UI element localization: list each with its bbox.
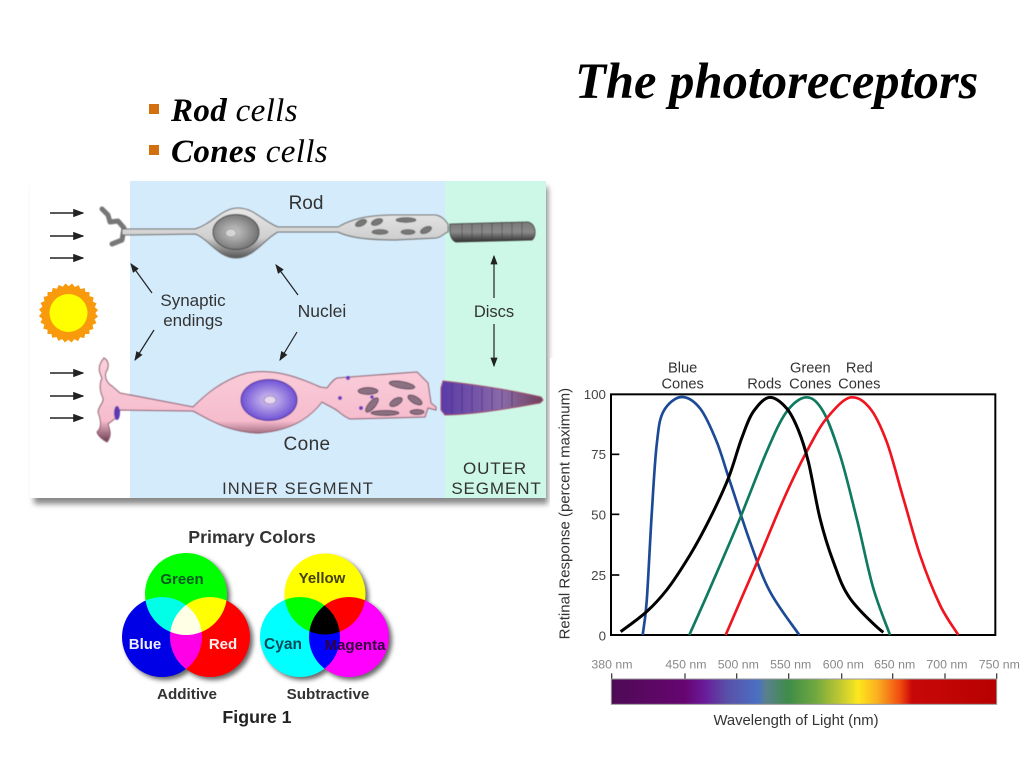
- diagram labels: [160, 193, 542, 498]
- label: Yellow: Yellow: [299, 570, 346, 587]
- y axis ticks: [611, 454, 619, 575]
- icon: sun: [39, 283, 98, 343]
- label: Cyan: Cyan: [264, 636, 302, 653]
- wavelength ticks: [612, 673, 997, 679]
- label: rods: Rods: [747, 377, 781, 393]
- caption: subtractive: Subtractive: [287, 686, 369, 703]
- value: 0: 0: [599, 628, 606, 643]
- panel: rod and cone diagram: [30, 181, 548, 504]
- wavelength labels: [591, 658, 1020, 672]
- curve: red cones: [726, 397, 958, 635]
- label: 380 nm: 380 nm: [591, 658, 633, 672]
- label: 650 nm: 650 nm: [874, 658, 915, 672]
- panel: primary colors: [122, 527, 389, 727]
- label: Rod: Rod: [289, 193, 323, 214]
- circle labels: [129, 570, 386, 654]
- label: green cones: Green: [790, 361, 831, 377]
- chart: additive circles: [122, 553, 250, 677]
- panel: retinal response chart: [550, 358, 1024, 738]
- label: red cones: Cones: [838, 377, 881, 393]
- label: Magenta: Magenta: [325, 637, 386, 654]
- y axis title: Retinal Response (percent maximum): [556, 388, 573, 639]
- caption: additive: Additive: [157, 686, 217, 703]
- caption: figure 1: Figure 1: [222, 707, 292, 727]
- cone cell: [97, 358, 543, 442]
- label: Synaptic endings: endings: [163, 311, 223, 330]
- label: Synaptic endings: Synaptic: [160, 291, 226, 310]
- pointer arrows: [131, 256, 494, 366]
- light arrows: rod: [50, 213, 83, 258]
- label: Inner segment: INNER SEGMENT: [222, 480, 374, 498]
- plot frame: [611, 394, 995, 635]
- curve: green cones: [689, 397, 890, 635]
- chart: subtractive circles: [260, 554, 389, 677]
- label: red cones: Red: [846, 361, 873, 377]
- label: 550 nm: 550 nm: [770, 658, 811, 672]
- label: 700 nm: 700 nm: [926, 658, 968, 672]
- label: Nuclei: Nuclei: [298, 301, 346, 321]
- curve labels: [661, 361, 881, 393]
- light arrows: cone: [50, 373, 83, 418]
- label: Blue: Blue: [129, 636, 161, 653]
- label: Discs: Discs: [474, 303, 514, 321]
- bullet list: [149, 93, 328, 170]
- label: blue cones: Blue: [668, 361, 697, 377]
- value: 75: 75: [591, 447, 606, 462]
- label: 450 nm: 450 nm: [665, 658, 707, 672]
- title: The photoreceptors: [575, 53, 978, 109]
- label: Cone: Cone: [283, 434, 331, 455]
- spectrum bar: [611, 679, 997, 704]
- label: 750 nm: 750 nm: [979, 658, 1020, 672]
- value: 25: 25: [591, 568, 606, 583]
- label: Red: Red: [209, 636, 237, 653]
- label: green cones: Cones: [789, 377, 832, 393]
- curve: blue cones: [643, 397, 799, 635]
- label: Outer segment: OUTER: [463, 459, 527, 478]
- x axis title: Wavelength of Light (nm): [713, 713, 879, 729]
- label: 500 nm: 500 nm: [718, 658, 759, 672]
- curve: rods: [621, 397, 883, 632]
- label: Outer segment: SEGMENT: [451, 479, 542, 498]
- heading: primary colors: Primary Colors: [188, 527, 316, 547]
- label: 600 nm: 600 nm: [823, 658, 864, 672]
- value: 50: 50: [591, 507, 606, 522]
- label: Green: Green: [160, 571, 204, 588]
- label: blue cones: Cones: [661, 377, 704, 393]
- y axis values: [584, 387, 606, 643]
- value: 100: 100: [584, 387, 606, 402]
- rod cell: [102, 208, 535, 258]
- bullet: cones cells: Cones cells: [171, 134, 328, 170]
- bullet: rod cells: Rod cells: [170, 93, 298, 129]
